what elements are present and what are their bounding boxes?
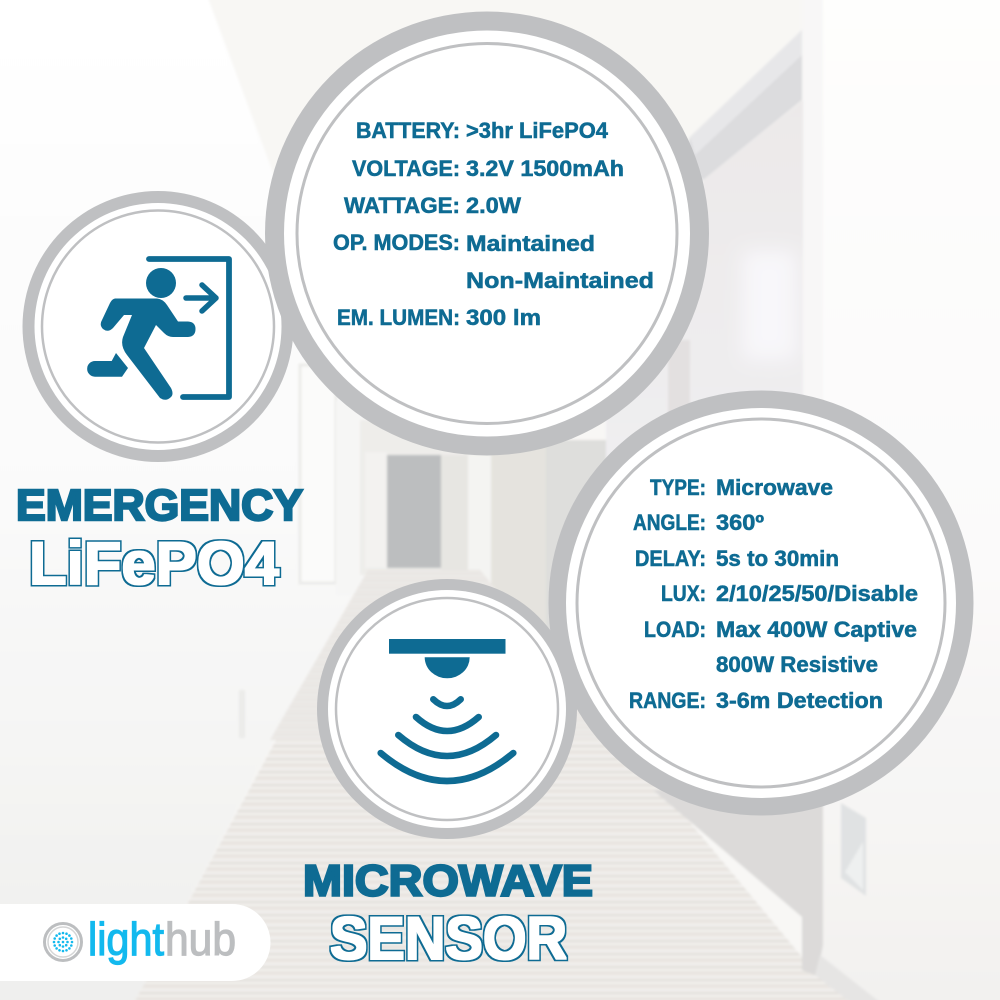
text block: battery specs: EM. LUMEN: [337,305,460,330]
heading: sensor outlined: SENSOR [330,905,567,972]
text block: battery specs: VOLTAGE: [352,156,460,181]
text block: sensor specs: DELAY: [635,546,706,571]
icon: ceiling microwave sensor with waves [381,639,513,781]
text block: battery specs: BATTERY: [356,118,460,143]
text block: battery specs: OP. MODES: [333,230,460,255]
text block: sensor specs: LOAD: [644,617,706,642]
panel: emergency battery specs circle [265,12,709,456]
text block: sensor specs: ANGLE: [633,510,706,535]
icon: running person at exit door [87,259,229,400]
text block: sensor specs: RANGE: [629,688,706,713]
text block: sensor specs: Microwave [716,475,833,500]
text block: sensor specs: 360º [716,510,764,535]
panel: microwave icon circle [317,579,577,839]
text block: sensor specs: TYPE: [650,475,706,500]
text block: battery specs: 2.0W [466,193,521,218]
panel: sensor specs circle [548,390,974,816]
text block: battery specs [333,118,654,330]
logo wordmark: hub [165,913,236,965]
text block: sensor specs: 3-6m Detection [716,688,883,713]
text block: sensor specs [629,475,918,713]
text block: battery specs: Maintained [466,231,595,256]
logo: lighthub pill [0,904,270,981]
text block: battery specs: 3.2V 1500mAh [466,156,624,181]
heading: emergency: EMERGENCY [16,481,303,530]
text block: sensor specs: 800W Resistive [716,652,878,677]
text block: sensor specs: LUX: [661,581,706,606]
logo wordmark: light [88,913,164,965]
text block: sensor specs: 2/10/25/50/Disable [716,581,918,606]
panel: emergency icon circle [22,191,294,462]
text block: sensor specs: 5s to 30min [716,546,839,571]
text block: battery specs: WATTAGE: [344,193,460,218]
text block: battery specs: 300 lm [466,305,541,330]
text block: battery specs: >3hr LiFePO4 [466,118,609,143]
icon: lighthub ring [44,924,82,960]
heading: LiFePO4 outlined: LiFePO4 [29,530,280,597]
heading: microwave: MICROWAVE [303,856,593,906]
text block: battery specs: Non-Maintained [466,268,654,293]
text block: sensor specs: Max 400W Captive [716,617,917,642]
